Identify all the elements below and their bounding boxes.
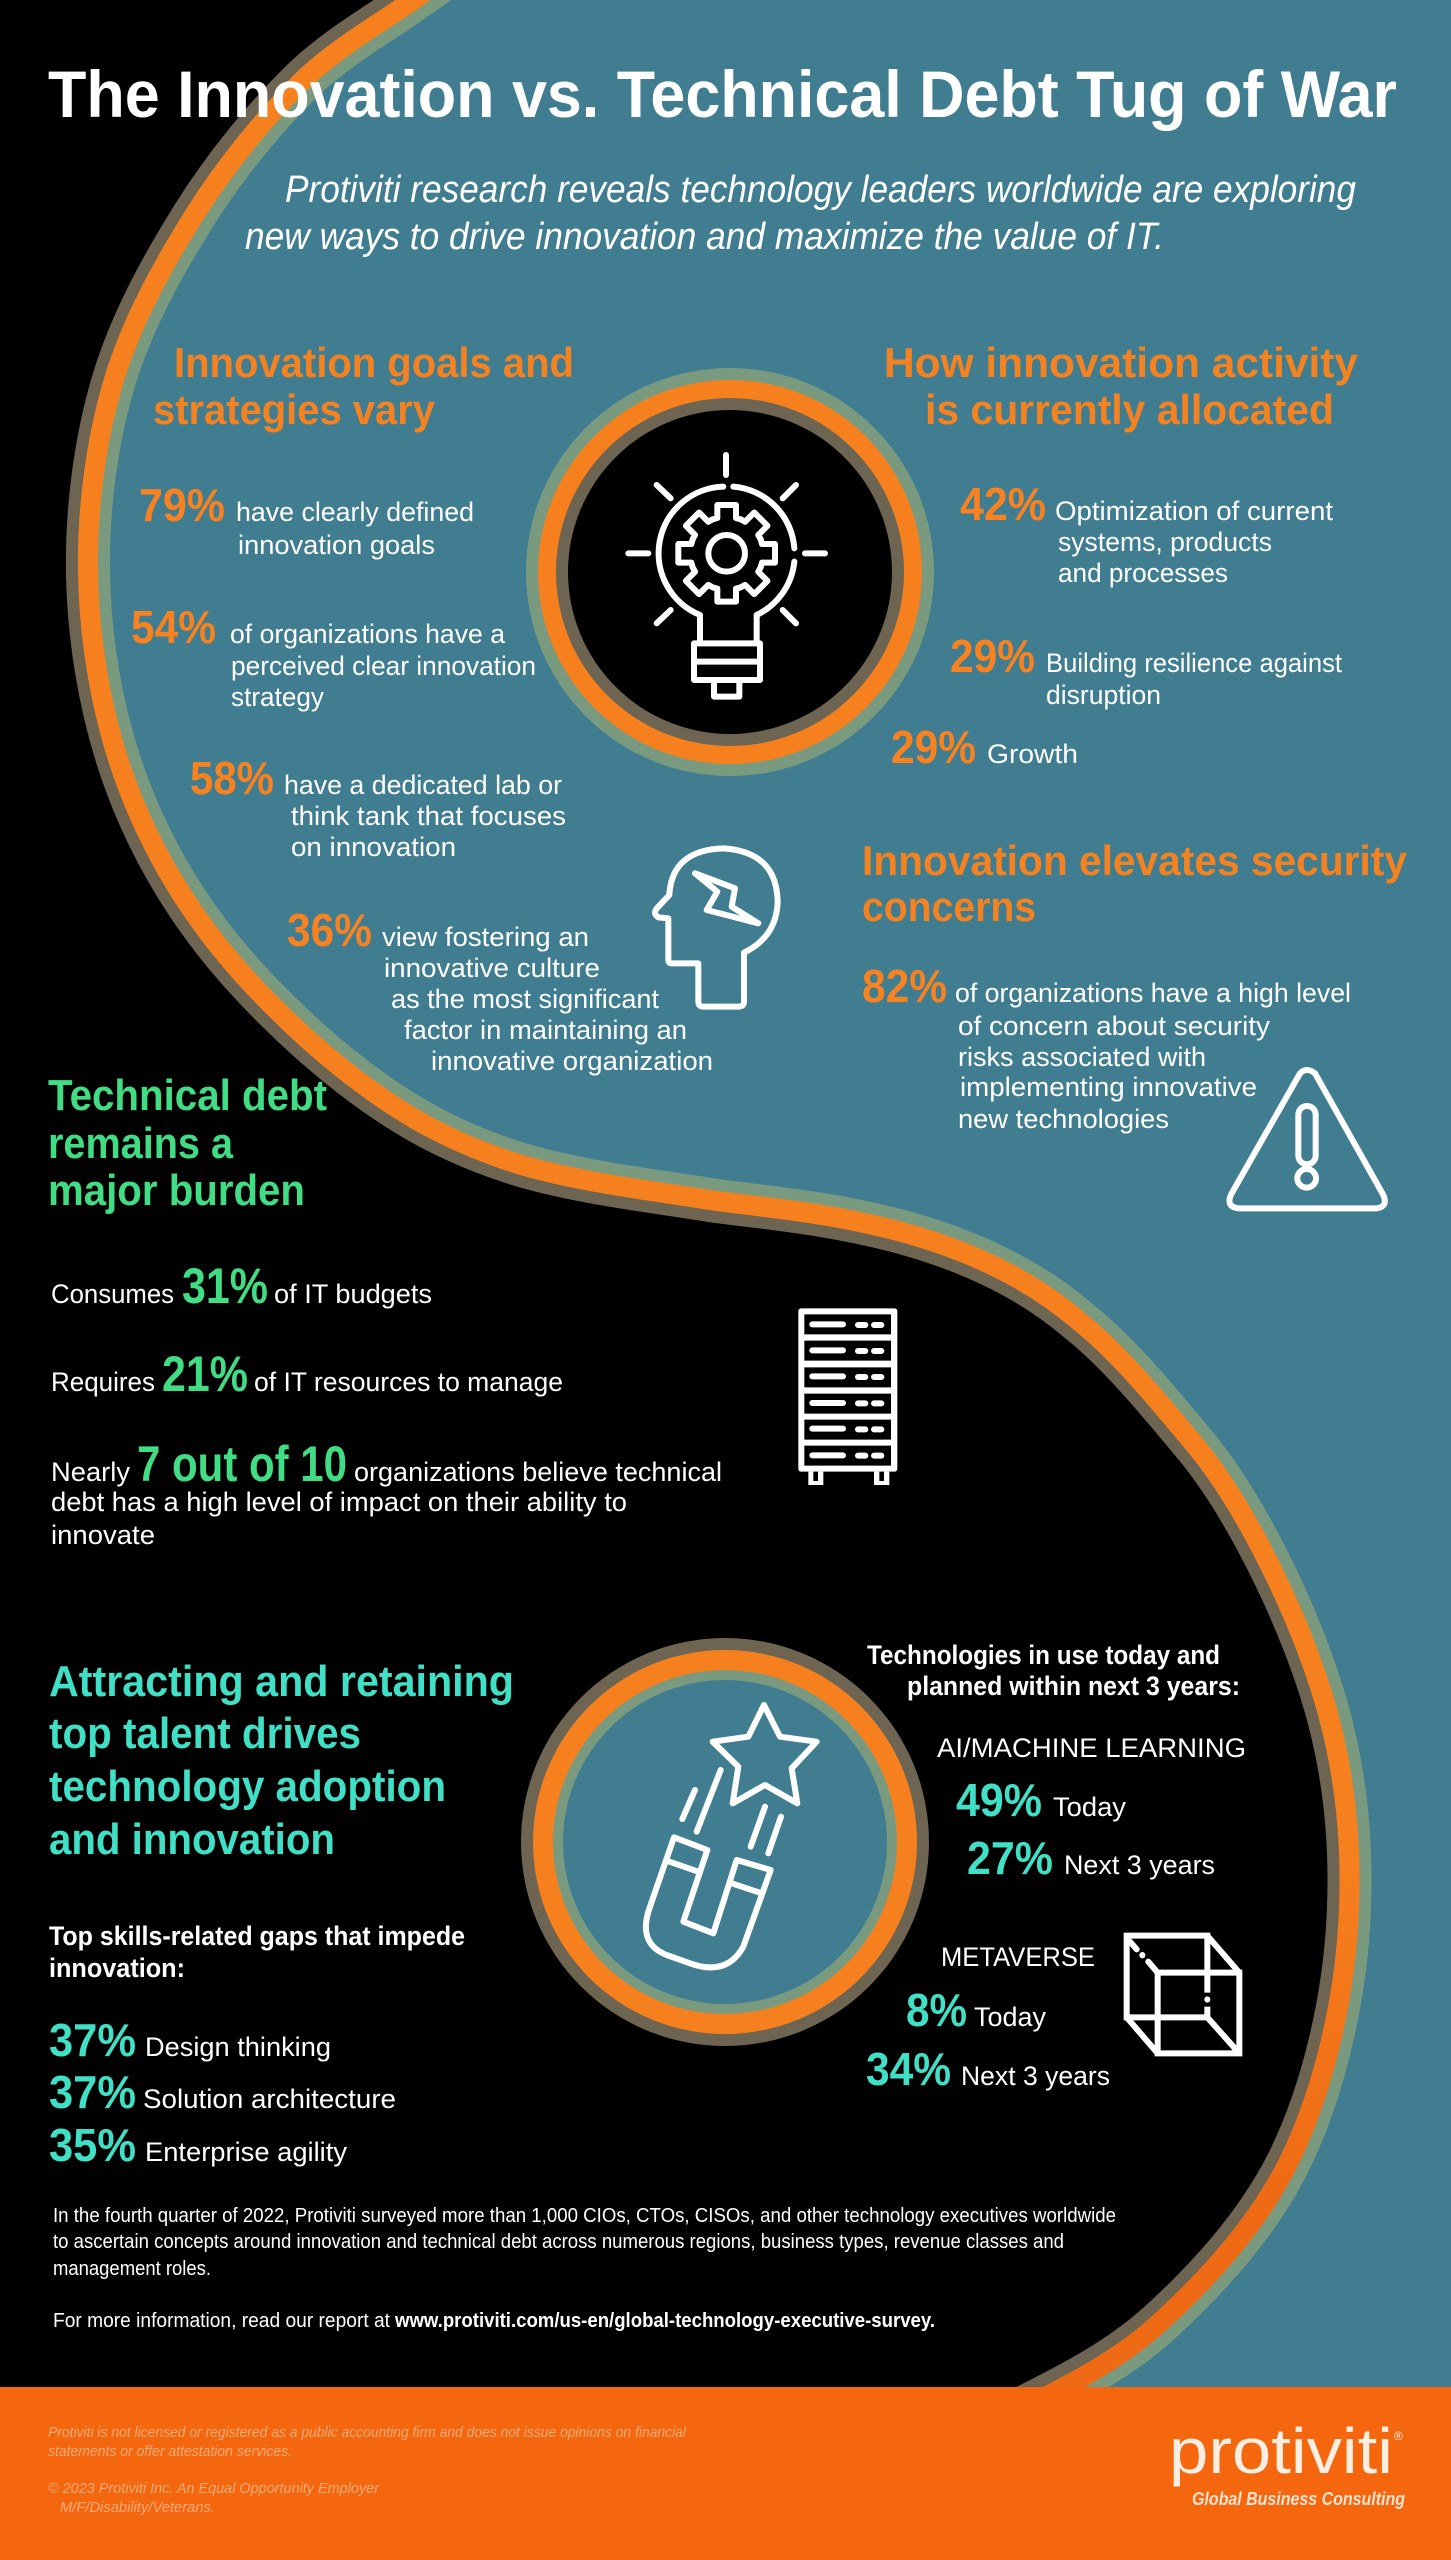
stat: 31% of IT budgets: of IT budgets [274,1279,432,1309]
stat: AI next 3 years: 27% [967,1832,1053,1884]
stat: metaverse next 3 years: 34% [866,2043,951,2095]
heading: innovation goals: strategies vary [153,386,436,433]
stat: 7 out of 10: 7 out of 10 [137,1436,347,1492]
stat: AI today [956,1774,1126,1826]
stat: 54%: 54% [131,601,216,653]
footer disclaimer: © 2023 Protiviti Inc. An Equal Opportunity Employer [48,2480,380,2497]
stat: design thinking: 37% [49,2014,136,2066]
heading: innovation activity: is currently allocated [925,386,1334,433]
methodology text: In the fourth quarter of 2022, Protiviti surveyed more than 1,000 CIOs, CTOs, CISOs, and other technology executives worldwide [53,2205,1116,2227]
stat: metaverse today: Today [974,2002,1046,2032]
stat: 82%: implementing innovative [960,1072,1257,1102]
stat: 58% [190,752,566,862]
icon: server rack [798,1308,897,1485]
stat: 82%: risks associated with [958,1042,1206,1072]
heading: technical debt [48,1071,327,1215]
stat: 7 out of 10: innovate [51,1520,155,1550]
icon: light bulb with gear [628,455,825,697]
stat: 7 out of 10 [51,1436,722,1550]
heading: attracting talent [49,1657,514,1864]
stat: 58%: 58% [190,752,274,804]
ring: top circle [526,368,934,776]
stat: metaverse next 3 years: Next 3 years [961,2061,1110,2091]
stat: 21% of IT resources [51,1346,563,1402]
title: The Innovation vs. Technical Debt Tug of War [48,57,1397,131]
footer disclaimer: statements or offer attestation services. [48,2443,292,2460]
report link [53,2310,935,2332]
heading: attracting talent: top talent drives [49,1709,361,1758]
stat: enterprise agility: 35% [49,2119,136,2171]
heading: technical debt: remains a [48,1119,233,1168]
stat: 42% [960,478,1334,588]
logo: protiviti: Global Business Consulting [1192,2489,1405,2509]
stat: 36%: innovative organization [431,1046,713,1076]
stat: 58%: on innovation [291,832,456,862]
stat: 58%: think tank that focuses [291,801,566,831]
subtitle: Protiviti research reveals technology leaders worldwide are exploring [285,169,1356,211]
stat: 36%: as the most significant [391,984,659,1014]
stat: solution architecture: Solution architecture [143,2084,396,2114]
subheading: technologies in use: planned within next 3 years: [907,1671,1240,1701]
stat: metaverse today [906,1984,1046,2036]
stat: solution architecture [49,2066,396,2118]
stat: 82%: of organizations have a high level [955,978,1351,1008]
stat: 54%: perceived clear innovation [231,651,536,681]
stat: 7 out of 10: debt has a high level of impact on their ability to [51,1487,627,1517]
stat: enterprise agility: Enterprise agility [145,2137,347,2167]
heading: security concerns: Innovation elevates security [862,837,1408,884]
methodology text: to ascertain concepts around innovation and technical debt across numerous regions, business types, revenue classes and [53,2231,1064,2253]
icon: wireframe cube [1127,1936,1239,2053]
stat: 21% of IT resources: 21% [162,1346,248,1402]
heading: attracting talent: Attracting and retaining [49,1657,514,1706]
stat: 36%: view fostering an [382,922,589,952]
stat: 58%: have a dedicated lab or [284,770,562,800]
subheading: technologies in use: Technologies in use today and [867,1640,1220,1670]
heading: innovation goals [153,339,574,433]
stat: 54%: of organizations have a [230,619,506,649]
stat: 7 out of 10: organizations believe technical [354,1457,722,1487]
stat: 36%: 36% [287,904,372,956]
stat: 29% resilience [950,630,1342,710]
stat: 31% of IT budgets: Consumes [51,1279,174,1309]
stat: AI today: Today [1053,1792,1126,1822]
stat: AI next 3 years: Next 3 years [1064,1850,1215,1880]
heading: innovation activity [884,339,1359,433]
stat: 31% of IT budgets [51,1258,432,1314]
stat: 82%: of concern about security [958,1011,1271,1041]
subheading: skills gaps: Top skills-related gaps that impede [49,1921,465,1951]
subtitle [245,169,1356,258]
stat: 54%: strategy [231,682,324,712]
stat: 21% of IT resources: Requires [51,1367,155,1397]
stat: 36%: innovative culture [384,953,600,983]
stat: 29% resilience: Building resilience against [1046,648,1342,678]
stat: metaverse next 3 years [866,2043,1110,2095]
stat: 82%: 82% [862,960,947,1012]
methodology text [53,2205,1116,2280]
heading: security concerns: concerns [862,883,1036,930]
heading: technical debt: Technical debt [48,1071,327,1120]
stat: 29% growth [891,721,1078,773]
heading: innovation activity: How innovation activity [884,339,1359,386]
stat: AI next 3 years [967,1832,1215,1884]
stat: 54% [131,601,536,712]
heading: technical debt: major burden [48,1166,305,1215]
stat: solution architecture: 37% [49,2066,136,2118]
footer disclaimer: Protiviti is not licensed or registered as a public accounting firm and does not issue opinions on financial [48,2424,687,2441]
stat: AI today: 49% [956,1774,1042,1826]
stat: 79% [139,479,474,560]
stat: 36% [287,904,713,1076]
logo: protiviti: protiviti [1169,2415,1393,2487]
stat: 29% resilience: disruption [1046,680,1161,710]
stat: 42%: Optimization of current [1055,496,1334,526]
footer disclaimer [48,2424,687,2516]
stat: enterprise agility [49,2119,347,2171]
subheading: skills gaps: innovation: [49,1953,185,1983]
stat: 42%: and processes [1058,558,1228,588]
footer band [0,2387,1451,2560]
logo: protiviti: ® [1394,2429,1403,2443]
stat: 21% of IT resources: of IT resources to manage [254,1367,563,1397]
heading: attracting talent: technology adoption [49,1762,446,1811]
stat: 31% of IT budgets: 31% [182,1258,268,1314]
stat: 7 out of 10: Nearly [51,1457,130,1487]
icon: magnet and star [646,1705,817,1967]
stat: design thinking: Design thinking [145,2032,331,2062]
stat: 79%: have clearly defined [236,497,474,527]
heading: innovation goals: Innovation goals and [174,339,574,386]
stat: 79%: innovation goals [238,530,435,560]
stat: 29% growth: Growth [987,739,1078,769]
stat: 82% [862,960,1351,1134]
subheading: skills gaps [49,1921,465,1983]
stat: metaverse today: 8% [906,1984,967,2036]
logo: protiviti [1169,2415,1405,2509]
stat: 29% growth: 29% [891,721,976,773]
label: AI/machine learning: AI/MACHINE LEARNING [937,1733,1246,1763]
label: metaverse: METAVERSE [941,1942,1095,1972]
stat: 42%: systems, products [1058,527,1272,557]
stat: 42%: 42% [960,478,1046,530]
stat: 29% resilience: 29% [950,630,1035,682]
stat: 82%: new technologies [958,1104,1169,1134]
subheading: technologies in use [867,1640,1240,1701]
heading: attracting talent: and innovation [49,1815,335,1864]
stat: 36%: factor in maintaining an [404,1015,687,1045]
methodology text: management roles. [53,2258,211,2280]
footer disclaimer: M/F/Disability/Veterans. [60,2499,215,2516]
heading: security concerns [862,837,1408,930]
icon: head with lightning bolt [655,848,778,1007]
report link: www.protiviti.com/us-en/global-technology-executive-survey. [394,2310,935,2332]
stat: design thinking [49,2014,331,2066]
ring: bottom circle [521,1638,929,2046]
report link: For more information, read our report at [53,2310,390,2332]
subtitle: new ways to drive innovation and maximize the value of IT. [245,216,1164,258]
icon: warning triangle [1229,1070,1385,1208]
stat: 79%: 79% [139,479,225,531]
